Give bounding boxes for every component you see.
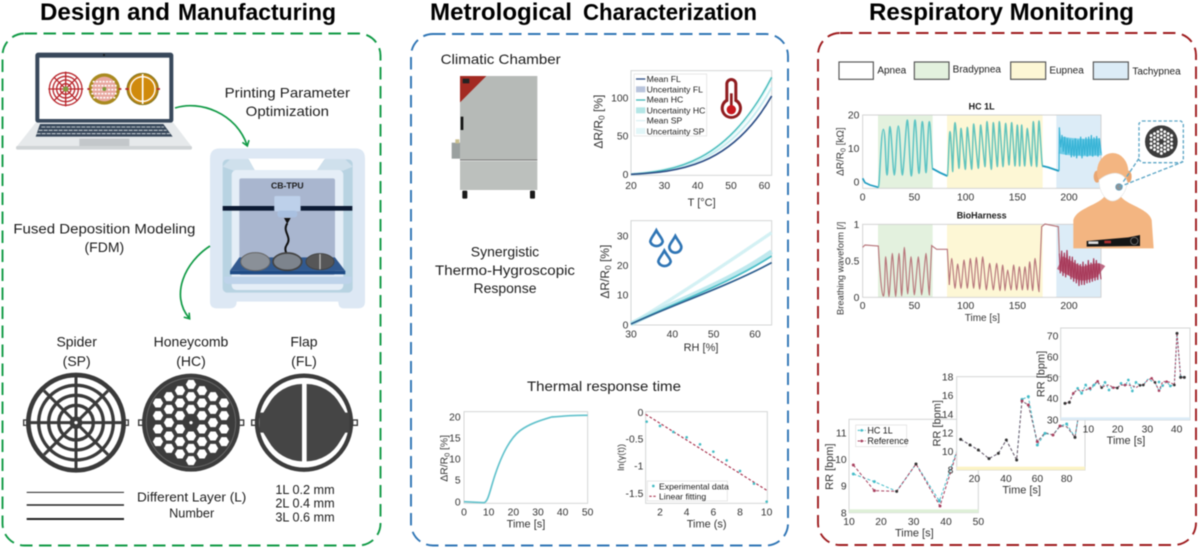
chart legend: Linear fitting: [659, 491, 706, 501]
chart legend: [647, 481, 729, 501]
arrow: printer to mask designs: [180, 246, 210, 318]
chart: bradypnea respiratory rate: 9: [841, 482, 847, 493]
chart: bradypnea respiratory rate: Time [s]: [895, 527, 934, 539]
text: honeycomb label: Honeycomb: [154, 334, 229, 350]
chart: HC 1L signal: 0: [854, 177, 860, 188]
chart: thermal response curve: 20: [508, 508, 519, 519]
chart: BioHarness signal: Breathing waveform [/]: [836, 222, 846, 315]
chart: HC 1L signal: 200: [1060, 192, 1078, 203]
chart: HC 1L signal: 10: [848, 144, 860, 155]
chart: resistance vs temperature: 100: [611, 93, 629, 104]
text: printing parameter optimization: Printing Parameter: [225, 84, 350, 100]
chart: resistance vs relative humidity: 20: [617, 261, 629, 272]
chart: resistance vs relative humidity: ΔR/R: [598, 270, 612, 299]
chart: tachypnea respiratory rate: 10: [1083, 424, 1094, 435]
chart: eupnea respiratory rate: 60: [1032, 474, 1043, 485]
chart: thermal response curve: 10: [483, 508, 495, 519]
chart: resistance vs temperature: 50: [617, 132, 629, 143]
chart: resistance vs temperature: T [°C]: [688, 197, 716, 209]
text: honeycomb label: [154, 334, 229, 369]
chart: HC 1L signal: 100: [957, 192, 975, 203]
icon: 3D printer: CB-TPU: [271, 181, 304, 191]
chart: resistance vs relative humidity: 40: [667, 330, 678, 341]
text: synergistic thermo-hygroscopic response: [435, 244, 575, 296]
chart: eupnea respiratory rate: 8: [948, 466, 954, 477]
chart: resistance vs temperature: ΔR/R: [592, 120, 606, 149]
chart: logarithmic linear fit: [616, 408, 773, 530]
chart: resistance vs temperature: 30: [659, 181, 670, 192]
chart: BioHarness signal: 50: [909, 301, 920, 312]
legend: breathing patterns: Eupnea: [1049, 65, 1084, 76]
chart: resistance vs temperature: [%]: [592, 95, 606, 115]
title: Metrological Characterization: [430, 0, 757, 26]
chart: BioHarness signal: 0.5: [845, 257, 860, 268]
chart: tachypnea respiratory rate: 60: [1047, 352, 1059, 363]
chart: BioHarness signal: 0: [860, 301, 866, 312]
chart: bradypnea respiratory rate: 40: [940, 517, 952, 528]
icon: thermometer: [721, 78, 742, 119]
chart: thermal response curve: 0: [455, 497, 461, 508]
chart legend: [856, 425, 909, 447]
chart legend: Mean SP: [647, 116, 682, 126]
chart legend: [634, 74, 707, 136]
chart: logarithmic linear fit: 2: [657, 508, 663, 519]
text: synergistic thermo-hygroscopic response: Response: [474, 280, 537, 296]
text: printing parameter optimization: [225, 84, 350, 119]
text: honeycomb label: (HC): [176, 353, 206, 369]
text: layer thicknesses: 3L 0.6 mm: [275, 511, 335, 525]
chart: eupnea respiratory rate: 10: [942, 447, 954, 458]
chart: tachypnea respiratory rate: RR [bpm]: [1035, 351, 1047, 397]
text: spider label: [56, 334, 97, 369]
chart: tachypnea respiratory rate: 30: [1047, 416, 1059, 427]
chart: HC 1L signal: [kΩ]: [836, 127, 847, 148]
icon: honeycomb mask filter: [139, 374, 244, 472]
chart: bradypnea respiratory rate: RR [bpm]: [824, 443, 836, 490]
chart: tachypnea respiratory rate: 20: [1112, 424, 1124, 435]
chart: resistance vs temperature: [592, 71, 772, 209]
chart: HC 1L signal: 0: [841, 148, 848, 152]
icon: laptop: [16, 53, 192, 150]
chart: eupnea respiratory rate: 20: [969, 474, 980, 485]
chart: resistance vs relative humidity: [%]: [598, 245, 612, 265]
chart: BioHarness signal: 1: [854, 220, 860, 231]
chart: resistance vs relative humidity: RH [%]: [684, 342, 718, 354]
chart: thermal response curve: 5: [455, 476, 461, 487]
chart: thermal response curve: 0: [461, 508, 467, 519]
chart: eupnea respiratory rate: 12: [942, 429, 954, 440]
chart: tachypnea respiratory rate: Time [s]: [1107, 435, 1145, 447]
chart: logarithmic linear fit: 8: [737, 508, 743, 519]
chart: eupnea respiratory rate: 18: [942, 372, 954, 383]
chart: resistance vs temperature: 0: [597, 115, 607, 120]
chart: resistance vs relative humidity: 50: [708, 330, 720, 341]
icon: climatic chamber: [452, 76, 537, 199]
chart legend: Uncertainty SP: [647, 126, 705, 136]
chart: HC 1L signal: 0: [860, 192, 866, 203]
chart legend: Mean FL: [647, 74, 681, 84]
chart: eupnea respiratory rate: RR [bpm]: [932, 400, 944, 447]
icon: 3D printer: [210, 148, 365, 308]
chart: thermal response curve: 50: [582, 508, 594, 519]
chart: logarithmic linear fit: 0: [638, 408, 644, 419]
text: layer thicknesses: 1L 0.2 mm: [275, 483, 335, 497]
panel: metrological characterization: [411, 34, 788, 546]
chart: tachypnea respiratory rate: 70: [1047, 332, 1059, 343]
text: flap label: [290, 334, 318, 369]
chart: eupnea respiratory rate: 80: [1061, 474, 1073, 485]
chart: logarithmic linear fit: -1: [634, 462, 644, 473]
icon: person with mask and chest belt: [1073, 153, 1154, 248]
chart: resistance vs temperature: 40: [692, 181, 704, 192]
chart: logarithmic linear fit: 10: [761, 508, 773, 519]
chart: eupnea respiratory rate: 14: [942, 410, 954, 421]
chart: resistance vs relative humidity: 60: [749, 330, 761, 341]
legend: breathing patterns: [839, 62, 1181, 79]
chart: resistance vs relative humidity: 0: [603, 265, 613, 270]
title: Design and Manufacturing: [40, 0, 336, 26]
chart: resistance vs temperature: 50: [725, 181, 737, 192]
chart: thermal response curve: ΔR/R: [439, 457, 450, 482]
chart: BioHarness signal: 200: [1060, 301, 1078, 312]
chart: thermal response curve: 40: [557, 508, 569, 519]
text: fused deposition modeling: [13, 220, 195, 255]
chart: logarithmic linear fit: Time (s): [687, 518, 727, 530]
chart: BioHarness signal: 100: [957, 301, 975, 312]
text: layer thicknesses: 2L 0.4 mm: [275, 497, 335, 511]
chart: HC 1L signal: 50: [909, 192, 920, 203]
icon: spider mask filter: [24, 375, 128, 470]
chart: eupnea respiratory rate: Time [s]: [1002, 484, 1041, 496]
chart: tachypnea respiratory rate: 50: [1047, 373, 1059, 384]
chart: HC 1L signal: HC 1L: [969, 102, 995, 112]
chart: HC 1L signal: ΔR/R: [836, 152, 847, 176]
text: different layer number: Different Layer (L): [137, 491, 246, 505]
text: different layer number: Number: [169, 506, 214, 520]
chart: BioHarness signal: [836, 211, 1101, 324]
legend: breathing patterns: Bradypnea: [953, 65, 1001, 76]
chart: resistance vs temperature: 60: [759, 181, 770, 192]
chart: resistance vs relative humidity: [598, 221, 772, 354]
chart: bradypnea respiratory rate: 11: [836, 428, 847, 439]
legend: breathing patterns: Apnea: [877, 65, 907, 76]
chart: thermal response curve: [439, 412, 594, 530]
text: thermal response time: Thermal response time: [527, 378, 681, 394]
chart: BioHarness signal: Time [s]: [965, 313, 1000, 324]
chart: resistance vs relative humidity: 10: [617, 291, 629, 302]
chart legend: Mean HC: [647, 95, 683, 105]
text: flap label: (FL): [291, 353, 317, 369]
chart legend: Reference: [867, 436, 909, 446]
icon: water drops: [650, 230, 681, 266]
chart legend: HC 1L: [867, 426, 893, 436]
chart: tachypnea respiratory rate: [1035, 328, 1190, 447]
chart: tachypnea respiratory rate: 40: [1171, 424, 1183, 435]
chart: bradypnea respiratory rate: [824, 419, 984, 539]
chart: bradypnea respiratory rate: 8: [841, 508, 847, 519]
chart: thermal response curve: [%]: [439, 435, 450, 453]
text: layer thicknesses: [275, 483, 335, 525]
chart: HC 1L signal: 150: [1009, 192, 1026, 203]
chart legend: Uncertainty HC: [647, 105, 705, 115]
chart: thermal response curve: 10: [449, 455, 461, 466]
chart: eupnea respiratory rate: 16: [942, 391, 954, 402]
chart: thermal response curve: 15: [449, 433, 461, 444]
chart: BioHarness signal: BioHarness: [957, 211, 1007, 221]
chart: eupnea respiratory rate: 40: [1000, 474, 1012, 485]
chart: resistance vs temperature: 20: [625, 181, 637, 192]
text: spider label: (SP): [63, 353, 91, 369]
panel: design and manufacturing: [2, 34, 380, 546]
chart: bradypnea respiratory rate: 10: [835, 455, 847, 466]
chart: bradypnea respiratory rate: 10: [843, 517, 855, 528]
chart: bradypnea respiratory rate: 30: [908, 517, 920, 528]
chart: tachypnea respiratory rate: 40: [1047, 394, 1059, 405]
chart: resistance vs relative humidity: 30: [617, 231, 629, 242]
chart legend: Experimental data: [659, 481, 729, 491]
chart: HC 1L signal: [836, 102, 1101, 203]
text: spider label: Spider: [56, 334, 97, 350]
chart: eupnea respiratory rate: [932, 372, 1085, 496]
text: fused deposition modeling: Fused Deposition Modeling: [13, 220, 195, 236]
text: different layer number: [137, 491, 246, 520]
chart: logarithmic linear fit: -0.5: [626, 435, 644, 446]
icon: sensor callout: [1119, 121, 1183, 187]
chart: logarithmic linear fit: -1.5: [626, 489, 644, 500]
chart: thermal response curve: Time [s]: [507, 518, 545, 530]
text: printing parameter optimization: Optimization: [246, 103, 329, 119]
chart: resistance vs relative humidity: 0: [623, 320, 629, 331]
chart: resistance vs temperature: 0: [623, 170, 629, 181]
chart: bradypnea respiratory rate: 50: [973, 517, 984, 528]
chart: thermal response curve: 30: [532, 508, 544, 519]
legend: breathing patterns: Tachypnea: [1132, 66, 1181, 77]
text: climatic chamber: Climatic Chamber: [441, 51, 561, 67]
chart: resistance vs relative humidity: 30: [625, 330, 637, 341]
chart: logarithmic linear fit: ln(γ(t)): [616, 444, 626, 471]
chart: thermal response curve: 0: [442, 453, 451, 457]
chart: BioHarness signal: 150: [1009, 301, 1026, 312]
arrow: laptop to printer: [175, 106, 247, 145]
text: fused deposition modeling: (FDM): [85, 239, 124, 255]
chart legend: Uncertainty FL: [647, 85, 703, 95]
icon: flap mask filter: [252, 376, 357, 470]
chart: thermal response curve: 20: [449, 412, 461, 423]
icon: layer lines: [27, 492, 124, 519]
chart: BioHarness signal: 0: [854, 293, 860, 304]
chart: logarithmic linear fit: 6: [710, 508, 716, 519]
chart: tachypnea respiratory rate: 30: [1142, 424, 1153, 435]
text: synergistic thermo-hygroscopic response: Synergistic: [471, 244, 539, 260]
text: flap label: Flap: [290, 334, 318, 350]
chart: logarithmic linear fit: 4: [684, 508, 690, 519]
chart: HC 1L signal: 20: [848, 111, 860, 122]
panel: respiratory monitoring: [818, 33, 1196, 545]
chart: bradypnea respiratory rate: 20: [875, 517, 887, 528]
text: synergistic thermo-hygroscopic response: Thermo-Hygroscopic: [435, 262, 575, 278]
